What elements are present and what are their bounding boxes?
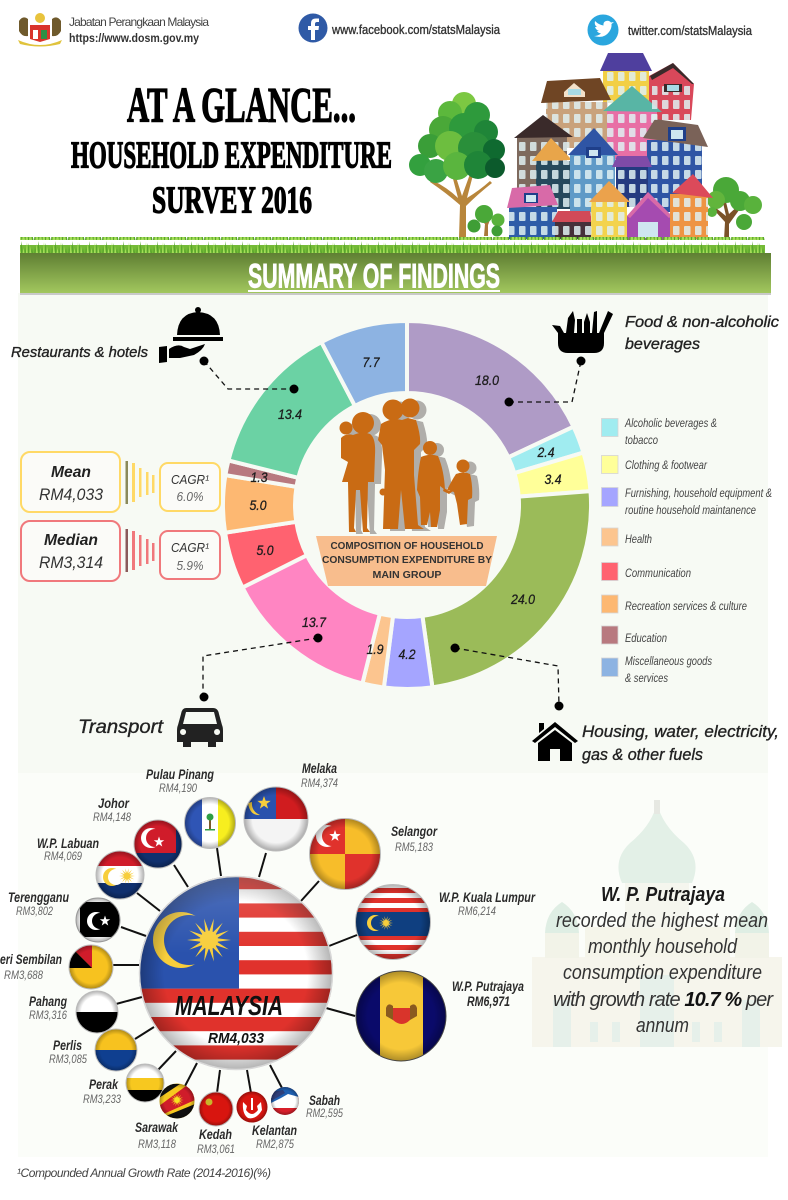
state labels with mean expenditure: RM4,374 xyxy=(301,776,338,790)
text block: Putrajaya highest mean: annum xyxy=(636,1015,689,1037)
legend: Miscellaneous goods xyxy=(625,654,712,668)
donut value labels: 7.7 xyxy=(362,354,381,370)
legend: tobacco xyxy=(625,433,658,447)
text block: Putrajaya highest mean: W. P. Putrajaya xyxy=(601,884,725,906)
flag: W.P. Labuan xyxy=(96,851,144,899)
state labels with mean expenditure: RM2,595 xyxy=(306,1106,343,1120)
funnel bars xyxy=(126,529,154,572)
state labels with mean expenditure: RM3,085 xyxy=(49,1052,87,1066)
CAGR box: CAGR¹ xyxy=(171,473,209,487)
state labels with mean expenditure: Pulau Pinang xyxy=(146,767,215,782)
median value box: RM3,314 xyxy=(39,553,103,572)
house: red xyxy=(649,63,694,120)
header: facebook link xyxy=(298,14,500,42)
panel: median expenditure xyxy=(21,521,220,581)
house: red roof dark xyxy=(552,211,592,239)
segment: education 1.3 xyxy=(225,460,298,487)
legend: Alcoholic beverages & xyxy=(624,416,717,430)
state labels with mean expenditure: RM3,233 xyxy=(83,1092,121,1106)
callout: food and non-alcoholic beverages: Food & non-alcoholic xyxy=(625,314,779,331)
legend: Communication xyxy=(625,566,691,580)
donut value labels: 13.7 xyxy=(302,614,327,630)
state labels with mean expenditure: RM6,971 xyxy=(467,994,510,1009)
segment: transport 13.7 xyxy=(242,555,380,684)
illustration: Putrajaya building watermark xyxy=(532,800,782,1047)
state labels with mean expenditure: RM4,069 xyxy=(44,849,82,863)
donut value labels: 5.0 xyxy=(256,542,274,558)
flag: Malaysia (main circle): RM4,033 xyxy=(208,1030,265,1047)
legend: Education xyxy=(625,631,667,645)
state labels with mean expenditure: Selangor xyxy=(391,824,438,839)
mean value box: Mean xyxy=(51,464,91,481)
house: purple roof yellow xyxy=(600,53,652,71)
header: twitter link: twitter.com/statsMalaysia xyxy=(628,24,752,38)
median value box: Median xyxy=(44,532,98,549)
footnote: ¹Compounded Annual Growth Rate (2014-2016)(%) xyxy=(17,1166,271,1180)
segment: miscellaneous 7.7 xyxy=(321,321,407,406)
header: facebook link: www.facebook.com/statsMalaysia xyxy=(331,23,500,37)
state labels with mean expenditure: Terengganu xyxy=(8,890,70,905)
icon: food bowl xyxy=(552,311,613,353)
donut value labels: 1.9 xyxy=(366,641,384,657)
house: large blue xyxy=(643,119,708,212)
donut centre label xyxy=(316,536,497,586)
CAGR box: CAGR¹ xyxy=(171,541,209,555)
state labels with mean expenditure: W.P. Putrajaya xyxy=(452,979,524,994)
mean value box: RM4,033 xyxy=(39,485,104,504)
flag: Sarawak xyxy=(159,1083,195,1119)
segment: furnishing 4.2 xyxy=(384,616,432,689)
donut chart: composition of household consumption expenditure xyxy=(223,321,591,689)
flag: Perak xyxy=(126,1064,164,1102)
title: HOUSEHOLD EXPENDITURE xyxy=(71,134,392,176)
donut value labels: 24.0 xyxy=(510,591,535,607)
state labels with mean expenditure: W.P. Kuala Lumpur xyxy=(439,890,536,905)
callout: restaurants and hotels xyxy=(11,307,298,394)
house: brown roof tan xyxy=(541,78,611,148)
state labels with mean expenditure: RM3,688 xyxy=(4,968,43,982)
state labels with mean expenditure: RM3,061 xyxy=(197,1142,235,1156)
donut value labels: 1.3 xyxy=(250,469,268,485)
callout: housing, water, electricity, gas and other fuels xyxy=(450,644,779,764)
heading banner: summary of findings: SUMMARY OF FINDINGS xyxy=(248,258,500,296)
state labels with mean expenditure: Pahang xyxy=(29,994,68,1009)
state labels with mean expenditure: RM6,214 xyxy=(458,904,496,918)
CAGR box: 6.0% xyxy=(176,490,204,504)
funnel bars xyxy=(126,461,154,504)
header: twitter link xyxy=(588,14,752,46)
legend xyxy=(602,416,772,685)
state labels with mean expenditure: RM2,875 xyxy=(256,1137,294,1151)
segment: health 1.9 xyxy=(362,614,393,688)
icon: cloche and hand xyxy=(159,307,223,363)
illustration: tree on the right xyxy=(707,177,762,240)
state labels with mean expenditure: RM5,183 xyxy=(395,840,433,854)
header: department logo and name: Jabatan Perangkaan Malaysia xyxy=(69,15,209,29)
text block: Putrajaya highest mean: consumption expenditure xyxy=(563,962,762,984)
state labels with mean expenditure: Kedah xyxy=(199,1127,232,1142)
segment: communication 5.0 xyxy=(225,522,307,588)
house: teal roof pink xyxy=(603,86,662,159)
callout: transport xyxy=(78,634,322,747)
flag: Kedah xyxy=(199,1092,233,1126)
header: department logo and name: https://www.dosm.gov.my xyxy=(69,31,199,45)
flag: Selangor xyxy=(309,818,381,890)
flag: Malaysia (main circle) xyxy=(139,875,333,1070)
state labels with mean expenditure: eri Sembilan xyxy=(0,952,62,967)
donut value labels: 13.4 xyxy=(278,406,302,422)
state labels with mean expenditure: Perlis xyxy=(53,1038,82,1053)
flag: Perlis xyxy=(95,1029,137,1071)
donut centre label: CONSUMPTION EXPENDITURE BY xyxy=(322,554,492,566)
text block: Putrajaya highest mean: monthly household xyxy=(588,936,738,958)
text block: Putrajaya highest mean: recorded the highest mean xyxy=(556,910,768,932)
house: orange roof dark teal xyxy=(532,138,572,209)
house: purple xyxy=(627,192,672,240)
flag: Kelantan xyxy=(236,1092,268,1122)
legend: Health xyxy=(625,532,652,546)
donut value labels: 18.0 xyxy=(475,372,499,388)
median value box xyxy=(21,521,120,581)
house: yellow xyxy=(589,181,630,239)
legend: & services xyxy=(625,671,668,685)
state labels with mean expenditure: W.P. Labuan xyxy=(37,836,99,851)
house: pink roof blue xyxy=(507,185,558,239)
title: AT A GLANCE... xyxy=(127,76,356,132)
house: purple roof navy xyxy=(612,156,652,207)
house: dark brown xyxy=(514,115,573,189)
segment: alcoholic beverages and tobacco 2.4 xyxy=(508,427,583,473)
flag: Melaka xyxy=(244,787,308,851)
header: department logo and name xyxy=(18,13,209,46)
state labels with mean expenditure: Johor xyxy=(98,796,130,811)
flag: W.P. Putrajaya xyxy=(356,971,446,1061)
house: mid blue xyxy=(568,128,618,215)
state labels with mean expenditure: Perak xyxy=(89,1077,119,1092)
donut value labels xyxy=(250,354,562,662)
CAGR box: 5.9% xyxy=(176,559,204,573)
callout: restaurants and hotels: Restaurants & hotels xyxy=(11,344,148,361)
title xyxy=(71,76,392,222)
donut value labels: 4.2 xyxy=(398,646,416,662)
flag: Pahang xyxy=(76,991,118,1033)
legend: routine household maintanence xyxy=(625,503,756,517)
segment: housing 24.0 xyxy=(422,491,591,687)
state labels with mean expenditure: Kelantan xyxy=(252,1123,297,1138)
text block: Putrajaya highest mean xyxy=(553,884,774,1037)
icon: car xyxy=(177,708,223,747)
donut value labels: 3.4 xyxy=(544,471,562,487)
callout: housing, water, electricity, gas and other fuels: Housing, water, electricity, xyxy=(582,722,779,741)
icon: Malaysian coat of arms xyxy=(18,13,62,46)
callout: food and non-alcoholic beverages: beverages xyxy=(625,336,700,353)
text block: Putrajaya highest mean: with growth rate 10.7 % per xyxy=(553,989,774,1011)
donut value labels: 5.0 xyxy=(250,497,267,513)
state labels with mean expenditure: RM4,148 xyxy=(93,810,131,824)
segment: clothing and footwear 3.4 xyxy=(514,453,590,497)
title: SURVEY 2016 xyxy=(152,180,312,222)
legend: Recreation services & culture xyxy=(625,599,747,613)
donut centre label: MAIN GROUP xyxy=(372,569,442,581)
icon: twitter xyxy=(588,14,618,46)
callout: transport: Transport xyxy=(78,717,164,738)
state labels with mean expenditure: RM3,316 xyxy=(29,1008,67,1022)
state connector lines xyxy=(113,848,357,1093)
illustration: large tree xyxy=(409,92,505,238)
donut centre label: COMPOSITION OF HOUSEHOLD xyxy=(330,540,484,552)
state labels with mean expenditure: RM4,190 xyxy=(159,781,197,795)
state labels with mean expenditure: Sarawak xyxy=(135,1120,179,1135)
house: orange xyxy=(670,174,713,239)
flag: Terengganu xyxy=(76,898,120,942)
state labels with mean expenditure: Sabah xyxy=(309,1093,340,1108)
icon: family silhouette xyxy=(340,398,479,534)
callout: food and non-alcoholic beverages xyxy=(504,311,779,406)
icon: house xyxy=(532,722,578,761)
segment: recreation 5.0 xyxy=(223,475,296,533)
panel: mean expenditure xyxy=(21,452,220,512)
state labels with mean expenditure: RM3,118 xyxy=(138,1137,176,1151)
illustration: cluster of colourful houses xyxy=(507,53,713,240)
heading banner: summary of findings xyxy=(20,253,771,296)
flag: Sabah xyxy=(271,1087,299,1115)
flag: Malaysia (main circle): MALAYSIA xyxy=(175,990,283,1021)
segment: restaurants and hotels 13.4 xyxy=(228,342,355,478)
state labels with mean expenditure: Melaka xyxy=(302,761,337,776)
flag: Pulau Pinang xyxy=(184,797,236,849)
CAGR box xyxy=(160,531,220,579)
state labels with mean expenditure xyxy=(0,761,536,1156)
CAGR box xyxy=(160,463,220,511)
segment: food and non-alcoholic beverages 18.0 xyxy=(407,321,574,457)
flag: Johor xyxy=(134,820,182,868)
icon: facebook xyxy=(298,14,328,42)
flag: Negeri Sembilan xyxy=(69,945,113,989)
illustration: grass strip xyxy=(20,237,765,254)
donut value labels: 2.4 xyxy=(537,444,555,460)
callout: housing, water, electricity, gas and other fuels: gas & other fuels xyxy=(582,745,703,764)
illustration: small tree beside houses xyxy=(468,205,504,236)
flag: W.P. Kuala Lumpur xyxy=(355,884,431,960)
state labels with mean expenditure: RM3,802 xyxy=(16,904,53,918)
mean value box xyxy=(21,452,120,512)
legend: Clothing & footwear xyxy=(625,458,708,472)
